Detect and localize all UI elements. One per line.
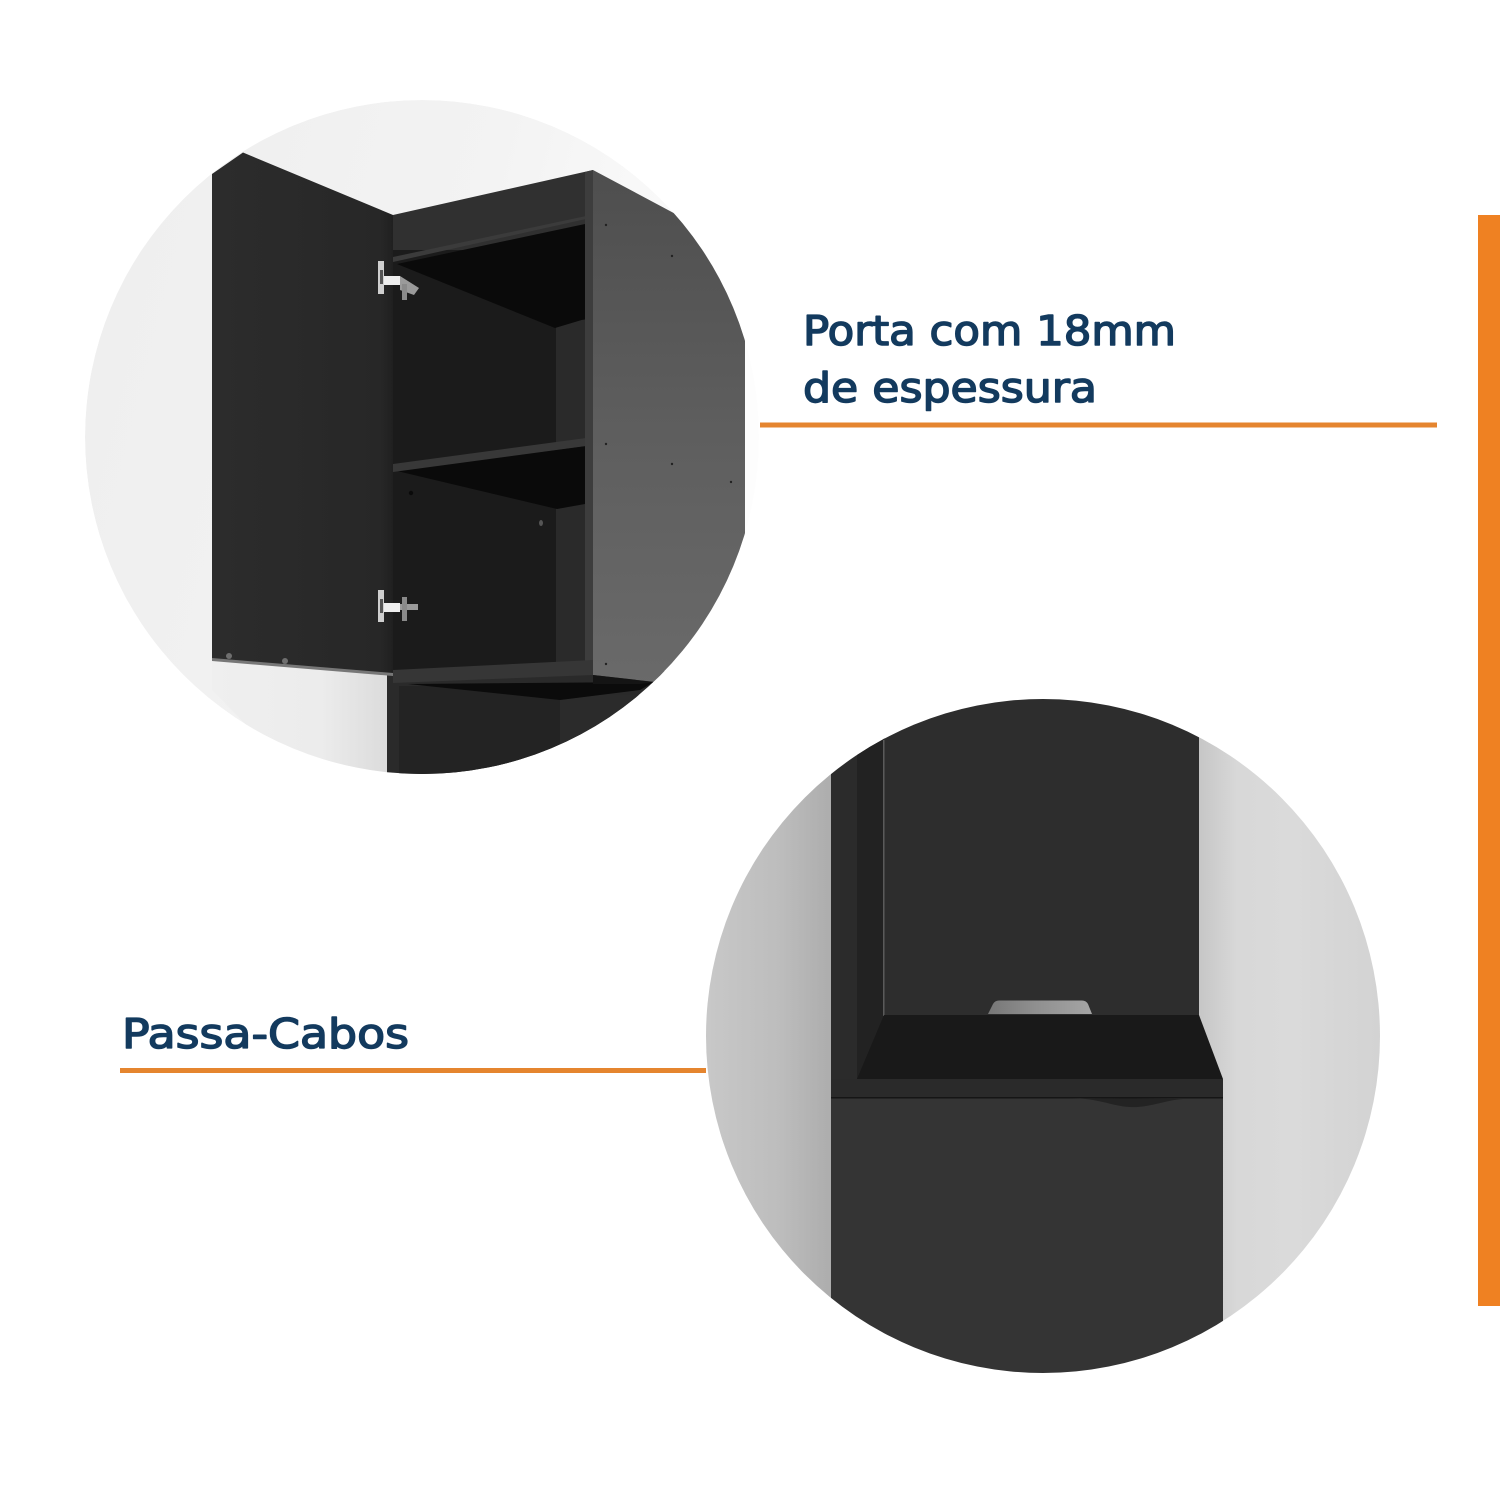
open door: [212, 152, 393, 675]
icon: bottom hinge: [378, 590, 418, 622]
wall left: [706, 774, 831, 1298]
drawer handle: [1079, 1098, 1180, 1107]
top shelf edge: [393, 216, 586, 262]
heading: Porta com 18mm de espessura: de espessura: [803, 364, 1097, 412]
lower cabinet: [387, 671, 664, 774]
callout line: cable pass: [120, 1068, 706, 1073]
heading: Porta com 18mm de espessura: [803, 307, 1176, 412]
cabinet screw holes: [409, 224, 732, 665]
panel: cable pass circle: [700, 690, 1389, 1397]
icon: top hinge: [378, 261, 419, 300]
top underside: [397, 224, 585, 328]
heading: Porta com 18mm de espessura: Porta com 18mm: [803, 307, 1176, 355]
icon: door feet: [226, 653, 288, 664]
door bottom edge: [212, 658, 393, 676]
cabinet column: [831, 738, 885, 1079]
upper back panel: [883, 690, 1199, 1016]
drawer front: [831, 1097, 1223, 1397]
shelf front edge: [393, 438, 586, 472]
cabinet front edge: [585, 170, 593, 675]
door shadow on wall: [300, 671, 388, 772]
cabinet side panel: [593, 170, 745, 692]
drawer edge line: [831, 1097, 1223, 1098]
cable grommet: [988, 1000, 1092, 1014]
panel: open cabinet door circle: [85, 100, 759, 786]
cabinet interior back wall: [393, 250, 585, 670]
callout line: door: [760, 422, 1437, 428]
shelf top surface: [857, 1015, 1223, 1079]
wall right: [1199, 738, 1380, 1334]
heading: Passa-Cabos: Passa-Cabos: [122, 1010, 409, 1058]
shelf front edge: [831, 1079, 1223, 1097]
accent bar: [1478, 215, 1500, 1306]
shelf underside: [397, 446, 585, 509]
cabinet top band: [393, 170, 593, 250]
bottom panel front edge: [393, 660, 593, 683]
